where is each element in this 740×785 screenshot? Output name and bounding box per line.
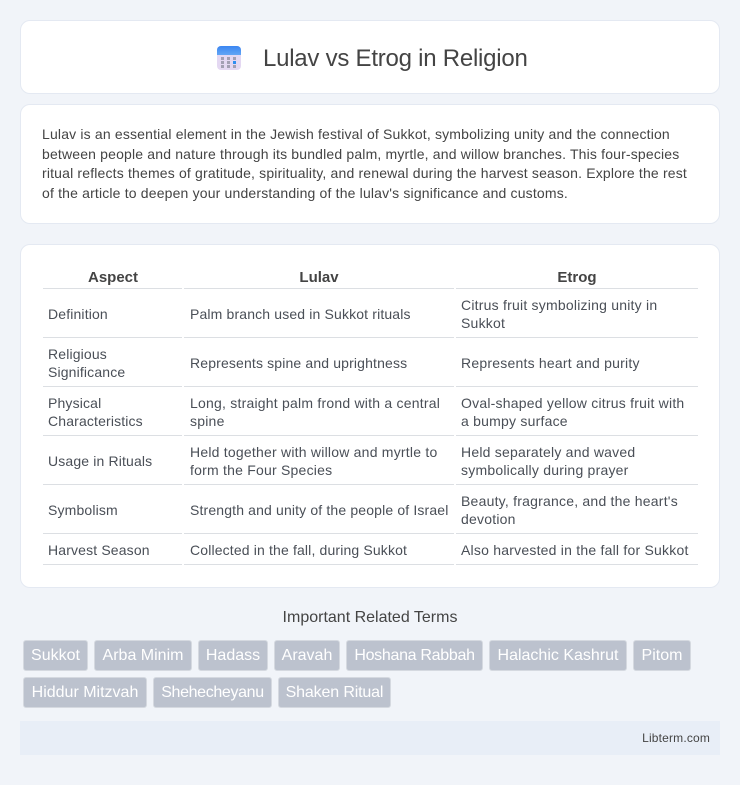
- tag: Sukkot: [31, 647, 80, 664]
- tag: [94, 640, 192, 671]
- panel: header: [20, 20, 720, 94]
- panel: comparison table: [20, 244, 720, 588]
- panel: introduction: [20, 104, 720, 224]
- row: symbolism: Beauty, fragrance, and the heart's: [461, 493, 678, 509]
- tag: [23, 677, 147, 708]
- row: harvest season: Collected in the fall, during Sukkot: [190, 542, 407, 558]
- row: physical characteristics: Physical: [48, 395, 101, 411]
- row: usage in rituals: Held together with willow and myrtle to: [190, 444, 437, 460]
- footer link: Libterm.com: [642, 731, 710, 745]
- intro text: [42, 126, 687, 201]
- table header: Lulav: [299, 269, 339, 286]
- tag: Hiddur Mitzvah: [32, 684, 138, 701]
- row: symbolism: [48, 493, 678, 527]
- title: Lulav vs Etrog in Religion: [263, 45, 528, 72]
- row: symbolism: devotion: [461, 511, 516, 527]
- tag: Shaken Ritual: [286, 684, 383, 701]
- tag: [278, 677, 391, 708]
- row: physical characteristics: Long, straight palm frond with a central: [190, 395, 440, 411]
- row: religious significance: Represents heart and purity: [461, 355, 640, 371]
- row: religious significance: [48, 346, 640, 380]
- row: religious significance: Significance: [48, 364, 125, 380]
- tag: Pitom: [642, 647, 682, 664]
- table header: Etrog: [557, 269, 597, 286]
- tag: [23, 640, 88, 671]
- tag: [346, 640, 483, 671]
- row: religious significance: Represents spine and uprightness: [190, 355, 407, 371]
- intro text: ritual reflects themes of gratitude, spirituality, and renewal during the harvest season. Explore the rest: [42, 165, 687, 181]
- tag: Arba Minim: [103, 647, 183, 664]
- row: symbolism: Strength and unity of the people of Israel: [190, 502, 448, 518]
- intro text: of the article to deepen your understanding of the lulav's significance and customs.: [42, 184, 568, 200]
- tag: Aravah: [282, 647, 332, 664]
- row: physical characteristics: [48, 395, 684, 429]
- tag: [153, 677, 272, 708]
- tag: [633, 640, 691, 671]
- row: definition: Citrus fruit symbolizing unity in: [461, 297, 657, 313]
- row: usage in rituals: symbolically during prayer: [461, 462, 629, 478]
- tag: Hoshana Rabbah: [354, 647, 475, 664]
- heading: related terms: Important Related Terms: [283, 609, 457, 626]
- row: physical characteristics: Oval-shaped yellow citrus fruit with: [461, 395, 684, 411]
- row: physical characteristics: Characteristics: [48, 413, 143, 429]
- row: usage in rituals: form the Four Species: [190, 462, 332, 478]
- table header: Aspect: [88, 269, 138, 286]
- row: definition: [48, 297, 657, 331]
- tag: [274, 640, 340, 671]
- row: harvest season: Harvest Season: [48, 542, 150, 558]
- row: symbolism: Symbolism: [48, 502, 118, 518]
- row: definition: Sukkot: [461, 315, 505, 331]
- tag: [489, 640, 627, 671]
- row: definition: Definition: [48, 306, 108, 322]
- table header: [88, 269, 597, 286]
- intro text: Lulav is an essential element in the Jewish festival of Sukkot, symbolizing unity and the connection: [42, 126, 670, 142]
- intro text: between people and nature through its bundled palm, myrtle, and willow branches. This four-species: [42, 146, 679, 162]
- tag list: [23, 640, 691, 708]
- tag: Shehecheyanu: [161, 684, 264, 701]
- tag: Halachic Kashrut: [498, 647, 618, 664]
- tag: Hadass: [206, 647, 260, 664]
- row: harvest season: Also harvested in the fall for Sukkot: [461, 542, 689, 558]
- footer: [20, 721, 720, 755]
- row: usage in rituals: [48, 444, 635, 478]
- row: religious significance: Religious: [48, 346, 107, 362]
- icon: calendar: [217, 46, 241, 70]
- row: usage in rituals: Usage in Rituals: [48, 453, 152, 469]
- row: physical characteristics: spine: [190, 413, 225, 429]
- row: usage in rituals: Held separately and waved: [461, 444, 635, 460]
- tag: [198, 640, 268, 671]
- row: harvest season: [48, 542, 689, 558]
- row: definition: Palm branch used in Sukkot rituals: [190, 306, 411, 322]
- row: physical characteristics: a bumpy surface: [461, 413, 568, 429]
